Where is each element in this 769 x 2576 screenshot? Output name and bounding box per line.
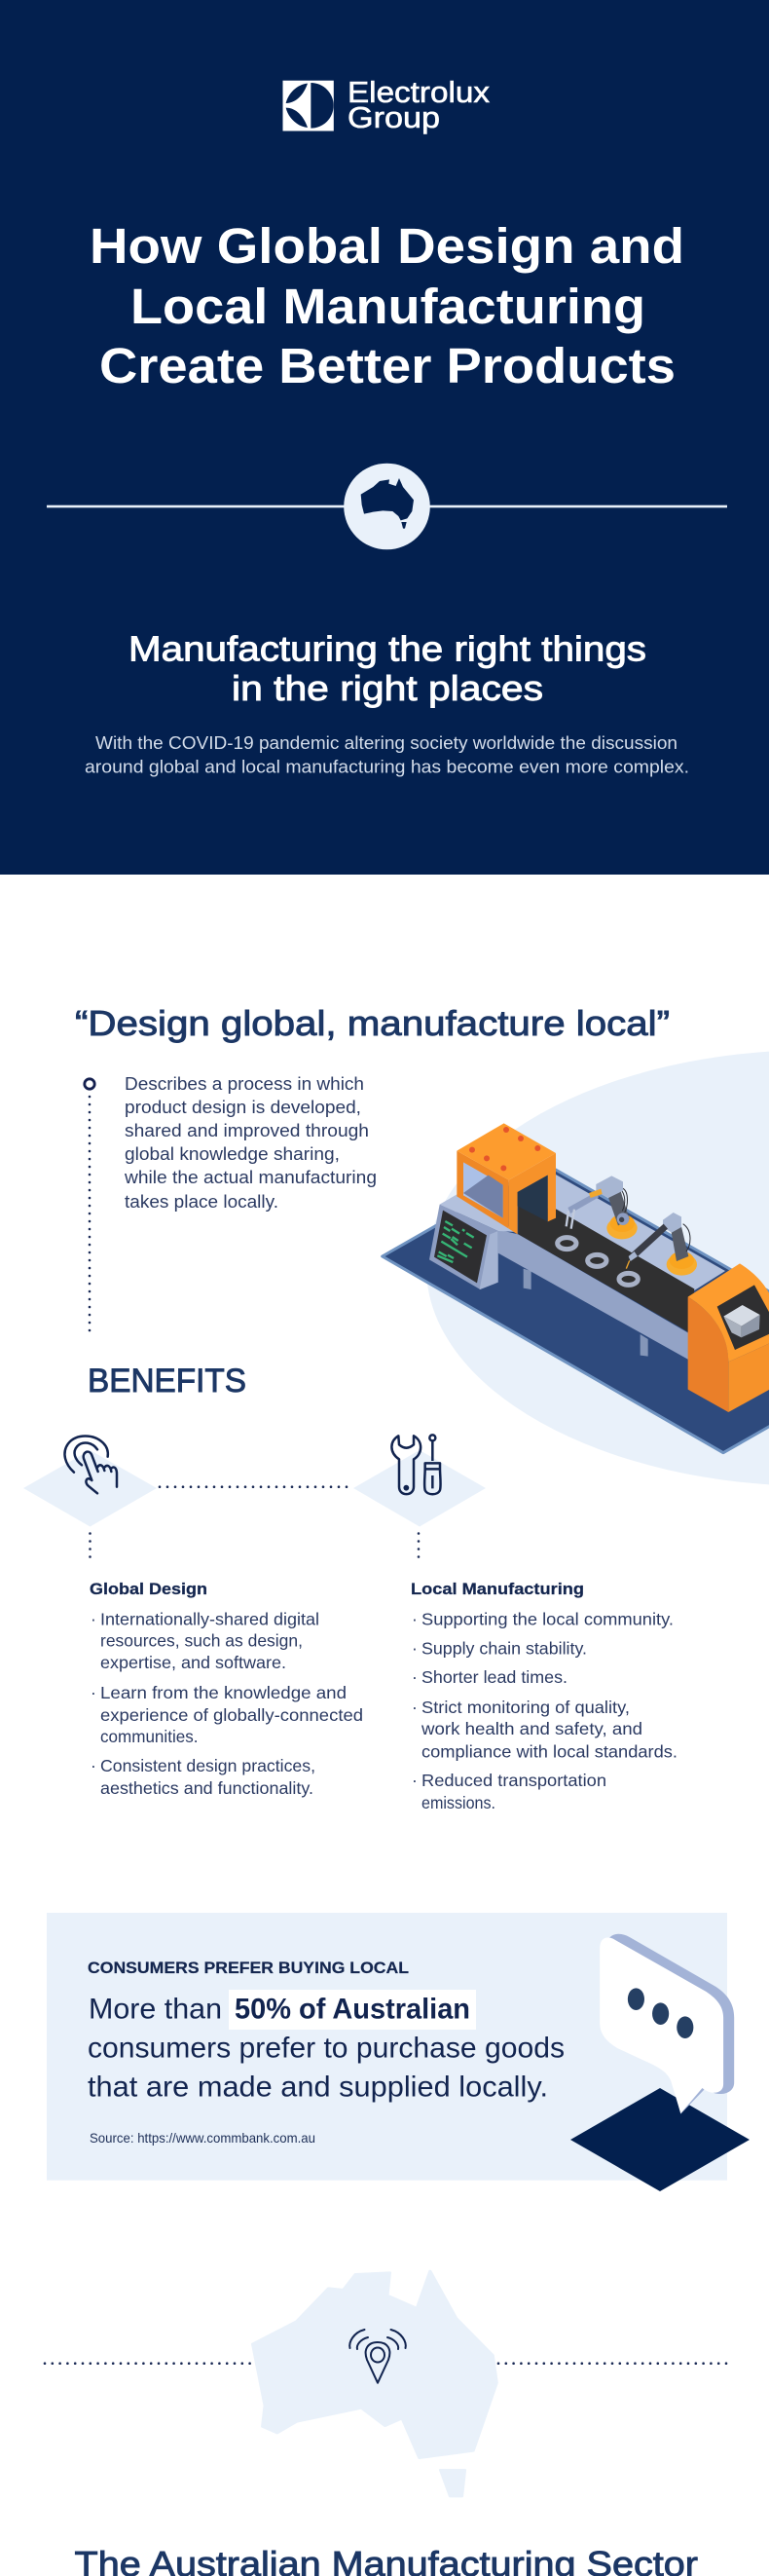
intro text: around global and local manufacturing has become even more complex. (85, 758, 689, 777)
highlight box (229, 1990, 476, 2030)
list: global design: resources, such as design, (100, 1631, 303, 1651)
list: global design: expertise, and software. (100, 1653, 286, 1672)
illustration: factory conveyor (383, 1123, 769, 1453)
column: local manufacturing: Local Manufacturing (411, 1580, 584, 1598)
list: local manufacturing: emissions. (421, 1793, 495, 1812)
list: global design: Internationally-shared digital (100, 1610, 319, 1629)
icon: touch hand (65, 1436, 117, 1493)
list: global design: communities. (100, 1727, 199, 1746)
list: local manufacturing: compliance with local standards. (421, 1742, 677, 1762)
panel: navy header (0, 0, 769, 875)
orange entry box (457, 1123, 556, 1234)
icon: Australia badge (344, 464, 430, 549)
benefit diamonds and connectors (23, 1450, 486, 1558)
list: local manufacturing: Supply chain stability. (421, 1639, 587, 1659)
text block: description: while the actual manufacturing (124, 1168, 377, 1187)
floor plate (383, 1164, 769, 1453)
list: local manufacturing: · (412, 1639, 418, 1659)
text block: description (124, 1074, 377, 1212)
statistic text: More than (89, 1994, 222, 2026)
dotted rule right (498, 2362, 728, 2365)
icon: wrench and screwdriver (391, 1435, 441, 1494)
list: global design: Consistent design practices, (100, 1756, 315, 1775)
conveyor back surface (556, 1175, 725, 1290)
dotted rule left (45, 2362, 254, 2365)
console (429, 1194, 518, 1289)
list: local manufacturing: Strict monitoring of quality, (421, 1698, 630, 1717)
list: local manufacturing: work health and safety, and (421, 1719, 642, 1738)
panel heading: CONSUMERS PREFER BUYING LOCAL (88, 1959, 409, 1977)
heading: design global: “Design global, manufacture local” (75, 1003, 670, 1043)
text block: description: global knowledge sharing, (125, 1144, 340, 1164)
logo: Electrolux Group (282, 75, 491, 134)
panel: consumers prefer buying local (47, 1913, 727, 2181)
subheading: in the right places (232, 668, 543, 708)
subheading (128, 629, 646, 708)
divider line (47, 505, 727, 507)
statistic text: that are made and supplied locally. (88, 2072, 548, 2104)
conveyor belt (518, 1206, 694, 1332)
metal rings (558, 1238, 638, 1285)
map: Australia with location pin (252, 2271, 496, 2496)
statistic text: 50% of Australian (235, 1994, 470, 2026)
title (90, 218, 684, 393)
text block: description: Describes a process in which (125, 1074, 364, 1094)
conveyor side rail (498, 1230, 689, 1361)
list: local manufacturing: Supporting the local community. (421, 1610, 674, 1629)
logo: Electrolux Group: Electrolux (348, 75, 491, 109)
list: global design: Learn from the knowledge and (100, 1683, 347, 1702)
list: local manufacturing: · (412, 1610, 418, 1629)
list: global design: · (91, 1610, 96, 1629)
list: global design: · (91, 1756, 96, 1775)
statistic text: consumers prefer to purchase goods (88, 2033, 565, 2065)
title: How Global Design and (90, 218, 684, 274)
list: global design (91, 1610, 363, 1798)
text block: description: takes place locally. (125, 1192, 278, 1212)
subheading: Manufacturing the right things (128, 629, 646, 668)
statistic text (88, 1994, 565, 2104)
icon: speech bubble on diamond (570, 1934, 750, 2191)
list: local manufacturing: · (412, 1771, 418, 1790)
robot arm 2 (626, 1213, 697, 1276)
leg front left (524, 1269, 531, 1289)
list: local manufacturing: · (412, 1698, 418, 1717)
list: global design: experience of globally-connected (100, 1705, 363, 1725)
list: local manufacturing: Shorter lead times. (421, 1667, 568, 1687)
source: Source: https://www.commbank.com.au (90, 2130, 315, 2146)
orange exit machine (688, 1263, 769, 1412)
list: global design: · (91, 1683, 96, 1702)
leg front right (641, 1334, 648, 1357)
intro text: With the COVID-19 pandemic altering society worldwide the discussion (95, 733, 677, 753)
column: local manufacturing (411, 1580, 677, 1812)
robot arm 1 (567, 1176, 638, 1239)
list: local manufacturing: · (412, 1667, 418, 1687)
intro text (85, 733, 689, 777)
heading: benefits: BENEFITS (88, 1363, 246, 1400)
text block: description: product design is developed, (125, 1098, 361, 1117)
background ellipse (426, 1050, 769, 1486)
timeline marker (85, 1079, 94, 1336)
column: global design: Global Design (90, 1580, 207, 1598)
logo: Electrolux Group: Group (348, 100, 440, 134)
text block: description: shared and improved through (125, 1121, 369, 1140)
list: local manufacturing (412, 1610, 677, 1812)
title: Create Better Products (99, 338, 676, 393)
list: local manufacturing: Reduced transportation (421, 1771, 606, 1790)
list: global design: aesthetics and functionality. (100, 1778, 313, 1798)
title: Local Manufacturing (130, 279, 645, 334)
icon: location pin (349, 2330, 406, 2383)
column: global design (90, 1580, 363, 1798)
